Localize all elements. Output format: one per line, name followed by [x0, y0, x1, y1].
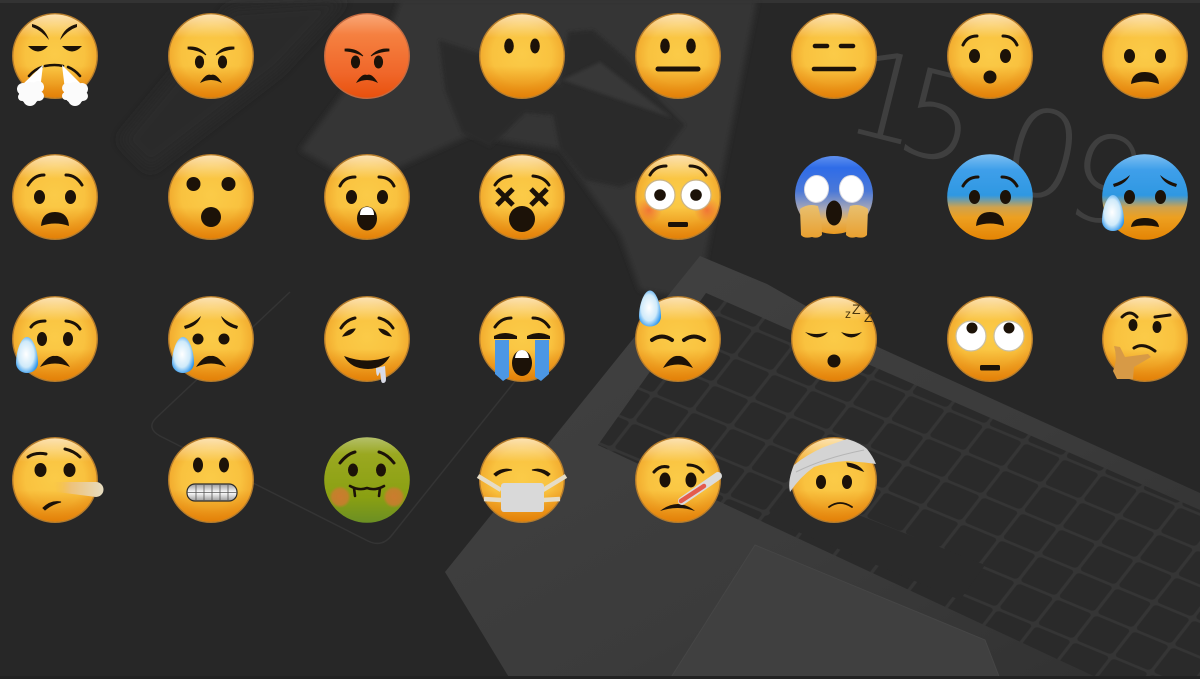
emoji: sleepy snoring face: Z	[864, 309, 873, 325]
emoji: drooling face	[325, 297, 409, 383]
emoji: open mouth face	[169, 155, 253, 239]
emoji: face with head bandage	[789, 438, 876, 522]
emoji: nauseated green face	[324, 437, 410, 523]
background photo: laptop, phone and glasses: 0	[988, 79, 1096, 233]
emoji: anxious blue face	[947, 154, 1033, 240]
emoji: crying face	[13, 297, 97, 381]
emoji: blue face with sweat	[1102, 154, 1188, 240]
emoji: hushed face	[948, 14, 1032, 98]
emoji: expressionless face	[792, 14, 876, 98]
emoji: lying face	[13, 438, 104, 522]
emoji: loudly crying face	[480, 297, 564, 381]
background photo: laptop, phone and glasses: 9	[1053, 105, 1160, 259]
emoji: downcast face with sweat	[636, 290, 720, 381]
emoji: sleepy snoring face: Z	[852, 301, 861, 317]
background photo: laptop, phone and glasses: 5	[885, 42, 993, 195]
emoji: grimacing face	[169, 438, 253, 522]
emoji: face with thermometer	[636, 438, 720, 522]
emoji: face with rolling eyes	[948, 297, 1032, 381]
emoji: face without mouth	[480, 14, 564, 98]
emoji: anguished face	[13, 155, 97, 239]
emoji: screaming in fear	[795, 156, 873, 238]
emoji: face with steam	[13, 14, 97, 106]
emoji: sleepy snoring face	[792, 297, 876, 381]
emoji: astonished face	[325, 155, 409, 239]
background photo: laptop, phone and glasses: 1	[833, 22, 941, 176]
emoji: dizzy face	[480, 155, 564, 239]
emoji: sleepy snoring face: z	[845, 307, 851, 321]
emoji: flushed face	[636, 155, 720, 239]
emoji: neutral face	[636, 14, 720, 98]
emoji: sad face with tear	[169, 297, 253, 381]
emoji: thinking face	[1103, 297, 1187, 381]
emoji: angry face	[169, 14, 253, 98]
emoji: face with medical mask	[478, 438, 566, 522]
emoji: pouting red face	[325, 14, 409, 98]
emoji: frowning open mouth	[1103, 14, 1187, 98]
